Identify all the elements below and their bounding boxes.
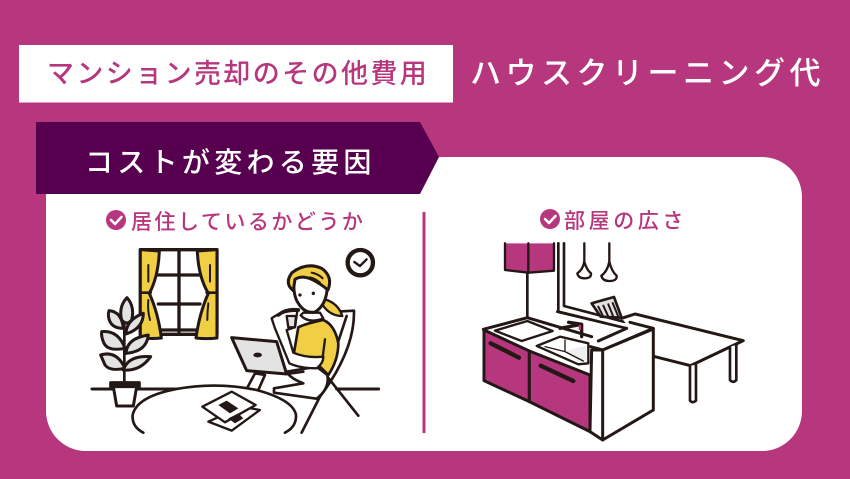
- illustration: woman with laptop in living room: [92, 250, 379, 433]
- illustration: kitchen counter with dining table: [483, 243, 743, 440]
- title: category label box: [19, 45, 453, 102]
- title: category label box: マンション売却のその他費用: [47, 59, 429, 89]
- round table: [133, 386, 296, 433]
- banner: cost factors heading: コストが変わる要因: [85, 147, 376, 178]
- wall cabinet: [505, 243, 554, 318]
- faucet: [560, 322, 582, 337]
- woman arm, cup and collar: [272, 310, 325, 368]
- counter top: [483, 312, 653, 350]
- window: [140, 250, 217, 339]
- title: main heading: ハウスクリーニング代: [470, 56, 825, 91]
- counter cabinet doors: [484, 330, 590, 432]
- divider line between factors: [422, 212, 426, 433]
- documents: [202, 392, 260, 431]
- counter side panel: [590, 329, 653, 440]
- chair back: [592, 297, 622, 318]
- dining table: [622, 314, 743, 402]
- heading: occupancy factor: 居住しているかどうか: [131, 211, 365, 234]
- chair: [302, 311, 358, 433]
- woman torso: [293, 320, 338, 375]
- clock: [348, 250, 373, 275]
- pendant lights: [577, 243, 617, 281]
- panel: main white card: [46, 157, 802, 451]
- wall edge lines: [558, 243, 630, 328]
- woman legs and laptop stand: [247, 367, 328, 399]
- floor line: [92, 384, 379, 393]
- cooktop: [495, 321, 553, 341]
- laptop: [232, 338, 303, 374]
- heading: room size factor: 部屋の広さ: [564, 210, 687, 233]
- woman head and hair: [288, 266, 342, 316]
- banner: cost factors heading: [36, 122, 439, 194]
- plant: [101, 298, 151, 406]
- sink: [537, 337, 588, 364]
